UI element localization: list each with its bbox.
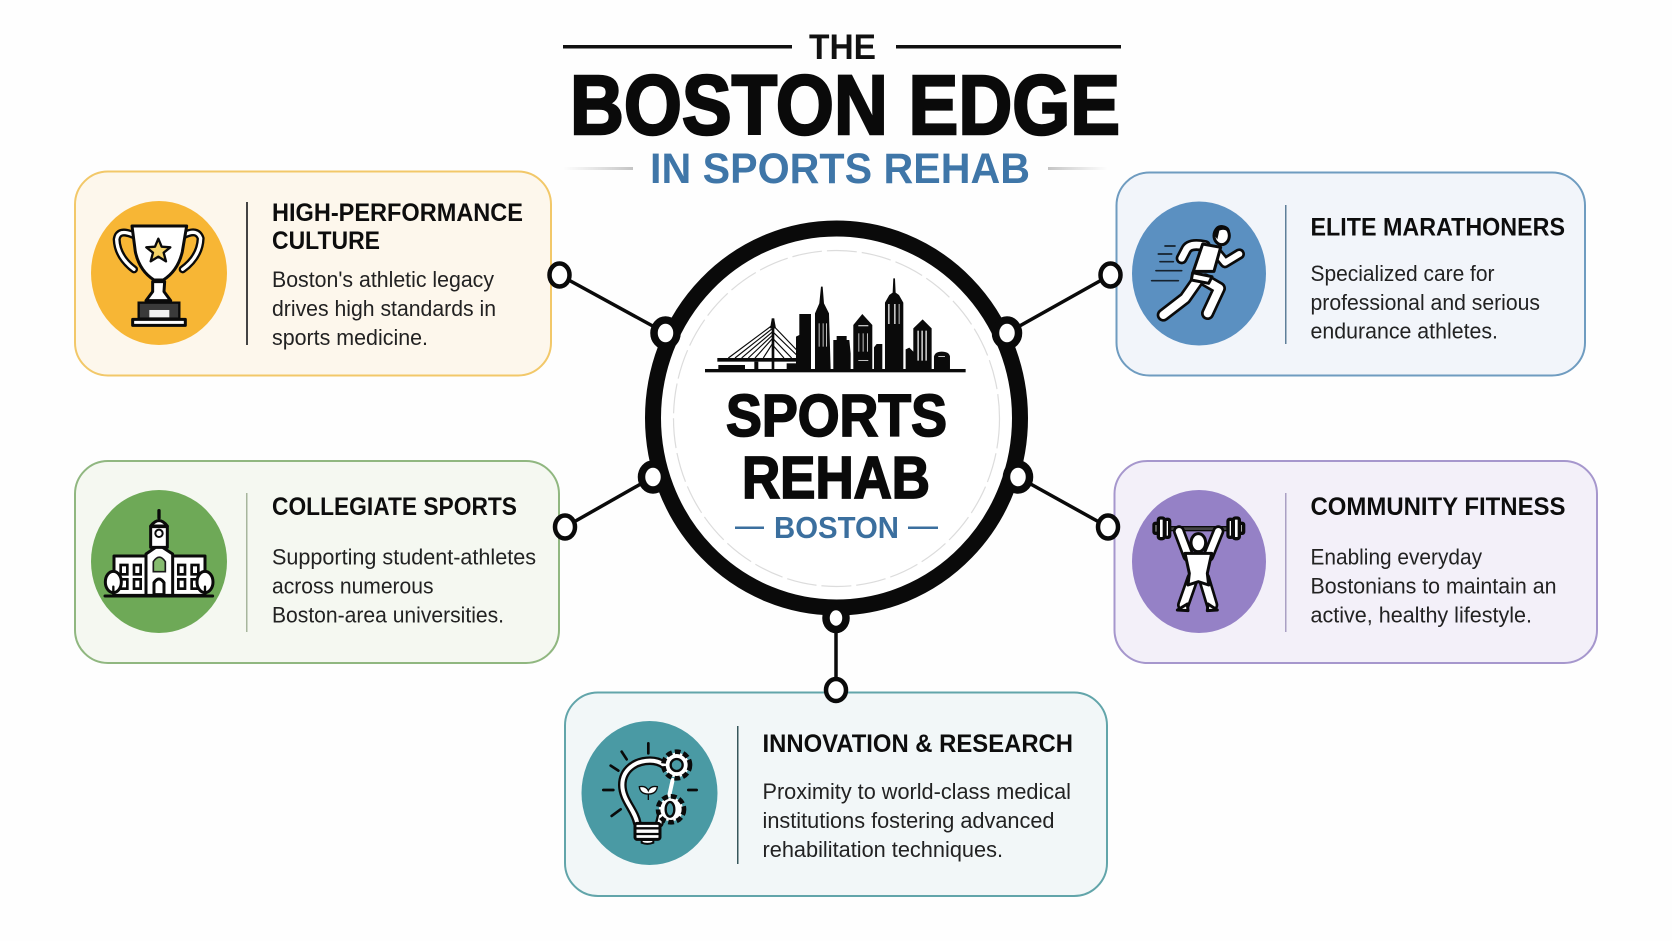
- panel: high-performance culture: [75, 172, 551, 376]
- divider: [737, 726, 738, 864]
- body text: rehabilitation techniques.: [762, 837, 1003, 862]
- icon: trophy: [91, 201, 227, 345]
- divider: [246, 493, 248, 632]
- body text: professional and serious: [1310, 290, 1540, 315]
- body text: Boston's athletic legacy: [272, 267, 495, 292]
- heading: INNOVATION & RESEARCH: [762, 730, 1073, 758]
- hub title: REHAB: REHAB: [742, 445, 930, 511]
- body text: Proximity to world-class medical: [762, 779, 1071, 804]
- subtitle: IN SPORTS REHAB: IN SPORTS REHAB: [650, 145, 1030, 193]
- body text: active, healthy lifestyle.: [1310, 602, 1532, 628]
- connector nodes: [550, 264, 1120, 701]
- divider: [1285, 205, 1286, 344]
- body text: Enabling everyday: [1310, 544, 1483, 570]
- divider: [1285, 493, 1286, 632]
- hub title: SPORTS: SPORTS: [726, 383, 947, 449]
- body text: Specialized care for: [1310, 261, 1495, 286]
- central hub circle: [653, 228, 1020, 608]
- heading: COMMUNITY FITNESS: [1310, 493, 1566, 521]
- icon: university building: [91, 490, 227, 633]
- body text: Supporting student-athletes: [272, 544, 536, 570]
- body text: [1310, 261, 1540, 344]
- body text: [272, 544, 536, 628]
- heading: ELITE MARATHONERS: [1310, 214, 1565, 242]
- icon: weightlifter: [1132, 490, 1266, 633]
- title block: [563, 28, 1121, 193]
- body text: institutions fostering advanced: [762, 808, 1054, 833]
- body text: [272, 267, 496, 350]
- heading: COLLEGIATE SPORTS: [272, 493, 517, 521]
- body text: sports medicine.: [272, 325, 428, 350]
- body text: Bostonians to maintain an: [1310, 574, 1556, 598]
- icon: light bulb with gears: [582, 721, 718, 865]
- heading: HIGH-PERFORMANCE: [272, 199, 523, 227]
- icon: runner: [1132, 202, 1266, 346]
- icon: Boston skyline: [705, 278, 966, 372]
- panel: collegiate sports: [75, 461, 559, 663]
- title line: THE: [563, 28, 1121, 67]
- body text: [762, 779, 1071, 862]
- connector lines: [560, 275, 1110, 690]
- title line: THE: THE: [809, 28, 876, 67]
- body text: drives high standards in: [272, 296, 496, 321]
- body text: endurance athletes.: [1310, 318, 1498, 344]
- title line: BOSTON EDGE: BOSTON EDGE: [570, 58, 1120, 152]
- body text: across numerous: [272, 574, 434, 598]
- body text: [1310, 544, 1556, 628]
- body text: Boston-area universities.: [272, 602, 504, 628]
- divider: [246, 202, 248, 345]
- panel: innovation and research: [565, 692, 1107, 896]
- heading: CULTURE: [272, 227, 380, 255]
- hub subtitle: BOSTON: BOSTON: [774, 510, 899, 545]
- heading: [272, 199, 523, 255]
- panel: community fitness: [1114, 461, 1597, 663]
- panel: elite marathoners: [1116, 172, 1585, 376]
